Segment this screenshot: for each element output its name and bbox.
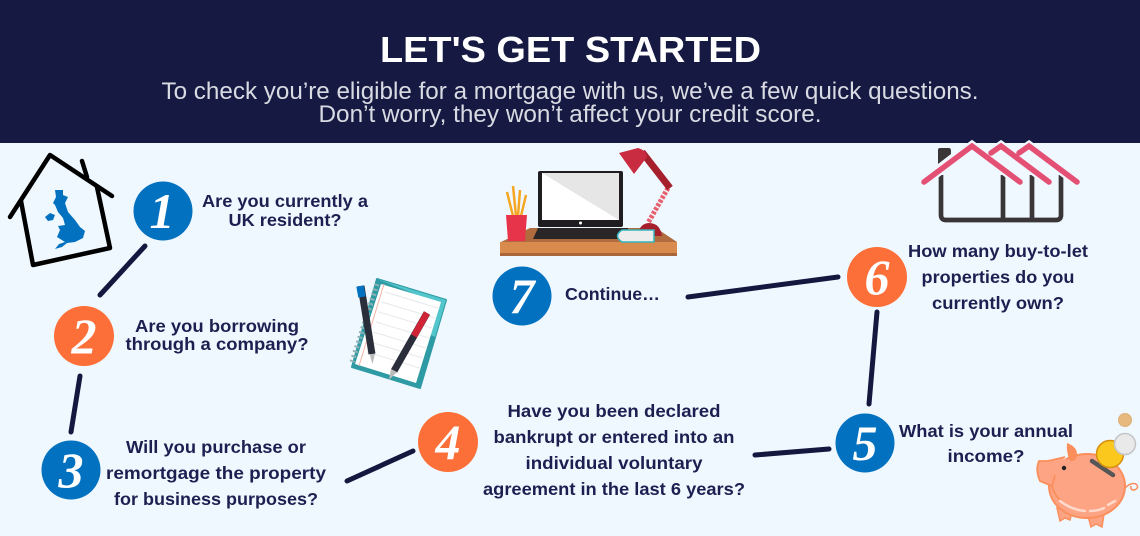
question 1 [202, 191, 368, 230]
question 5: What is your annual [899, 421, 1073, 441]
icon: row of houses [924, 146, 1077, 220]
header banner: Don’t worry, they won’t affect your credit score. [318, 101, 822, 128]
question 2: through a company? [126, 334, 308, 354]
question 4: Have you been declared [508, 401, 720, 421]
question 4: agreement in the last 6 years? [483, 479, 745, 499]
laptop [538, 171, 623, 227]
question 2: Are you borrowing [135, 316, 299, 336]
step 6 [847, 247, 907, 307]
question 6: How many buy-to-let [908, 241, 1088, 261]
icon: desk with laptop and lamp [500, 148, 677, 256]
step 2 [54, 306, 114, 366]
header banner [0, 0, 1140, 143]
connector lines [71, 246, 877, 481]
question 6: currently own? [932, 293, 1064, 313]
step 5: 5 [852, 415, 878, 471]
question 4 [483, 401, 745, 499]
step 4: 4 [434, 414, 460, 470]
step 1 [134, 182, 192, 240]
step 2: 2 [70, 308, 96, 364]
icon: UK map [45, 190, 85, 249]
step 1: 1 [150, 183, 174, 239]
step 3: 3 [58, 442, 84, 498]
question 2 [126, 316, 308, 354]
question 3: Will you purchase or [126, 437, 306, 457]
icon: house with UK map [10, 155, 112, 265]
book [618, 230, 654, 242]
question 4: bankrupt or entered into an [494, 427, 734, 447]
title: LET'S GET STARTED [380, 29, 761, 70]
question 1: UK resident? [228, 210, 342, 230]
step 7 [492, 266, 552, 326]
question 1: Are you currently a [202, 191, 368, 211]
step 5 [836, 414, 894, 472]
question 6 [908, 241, 1088, 313]
question 6: properties do you [922, 267, 1074, 287]
icon: notebook and pens [352, 279, 446, 388]
question 3: for business purposes? [114, 489, 318, 509]
continue label: Continue… [565, 284, 660, 304]
question 3: remortgage the property [106, 463, 326, 483]
step 6: 6 [864, 249, 890, 305]
step 3 [42, 440, 100, 500]
question 4: individual voluntary [526, 453, 703, 473]
subtitle: To check you’re eligible for a mortgage with us, we’ve a few quick questions. [162, 78, 978, 105]
icon: piggy bank with coins [1037, 414, 1138, 527]
question 3 [106, 437, 326, 509]
question 5: income? [948, 446, 1024, 466]
question 5 [899, 421, 1073, 466]
step 7: 7 [510, 268, 536, 324]
step 4 [418, 412, 478, 472]
lamp [648, 188, 668, 223]
